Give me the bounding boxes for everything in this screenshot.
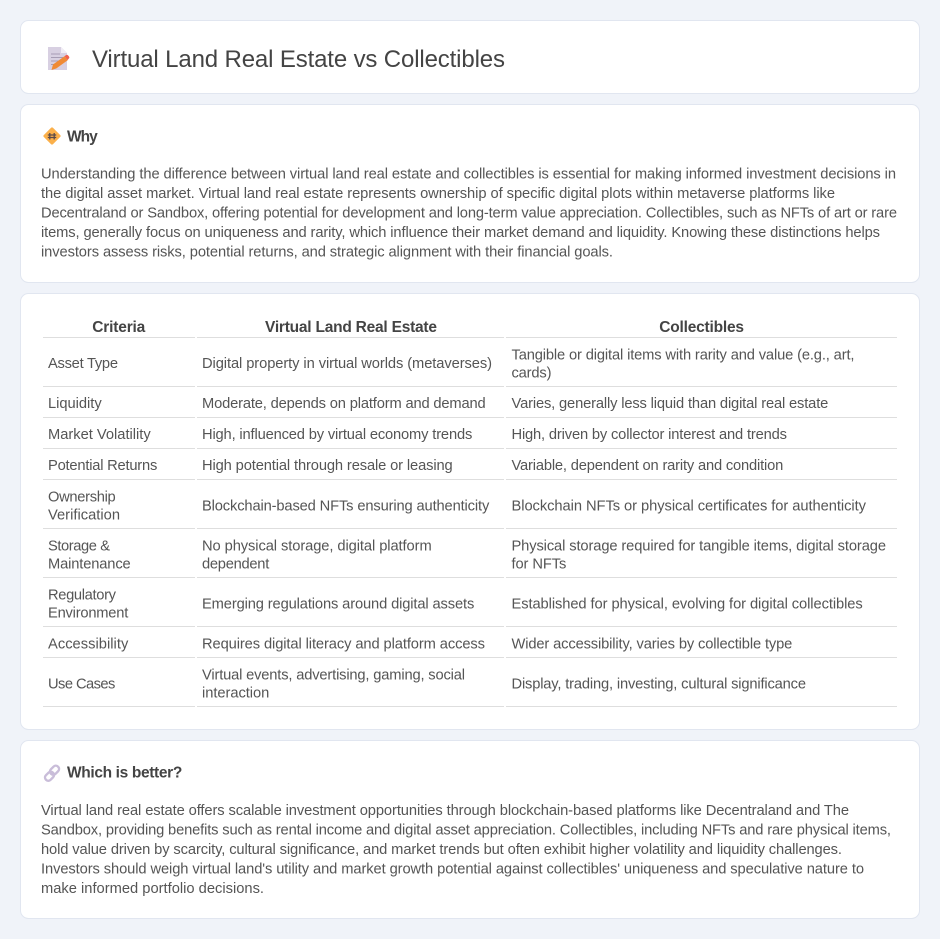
row: use cases: interaction (202, 686, 269, 702)
row: ownership verification: Ownership (48, 490, 116, 506)
row: regulatory environment: Regulatory (48, 588, 117, 604)
text block: which is better paragraph: Investors should weigh virtual land's utility and market growth potential against collectibles' uniqueness and speculative nature to (41, 862, 864, 878)
row: storage and maintenance: for NFTs (512, 556, 566, 572)
row: asset type (43, 347, 897, 386)
row: use cases: Use Cases (48, 676, 115, 692)
row: potential returns: Potential Returns (48, 458, 157, 474)
row: liquidity (43, 396, 897, 418)
row: storage and maintenance: No physical storage, digital platform (202, 538, 432, 554)
text block: which is better paragraph: hold value driven by scarcity, cultural significance, and market trends but often exhibit higher volatility and liquidity challenges. (41, 842, 842, 858)
text block: which is better paragraph (41, 803, 891, 897)
row: storage and maintenance: Maintenance (48, 556, 131, 572)
row: asset type: cards) (512, 365, 552, 381)
row: ownership verification: Verification (48, 508, 120, 524)
row: market volatility: High, driven by collector interest and trends (512, 427, 787, 443)
row: ownership verification: Blockchain NFTs or physical certificates for authenticity (512, 498, 867, 514)
row: regulatory environment: Emerging regulations around digital assets (202, 596, 474, 612)
row: asset type: Digital property in virtual worlds (metaverses) (202, 356, 492, 372)
text block: why paragraph: items, generally focus on uniqueness and rarity, which influence their market demand and liquidity. Knowing these distinctions helps (41, 225, 880, 241)
row: use cases: Virtual events, advertising, gaming, social (202, 668, 465, 684)
row: regulatory environment: Environment (48, 606, 128, 622)
table header row: Collectibles (659, 319, 744, 336)
row: use cases: Display, trading, investing, cultural significance (512, 676, 806, 692)
row: market volatility: High, influenced by virtual economy trends (202, 427, 472, 443)
row: accessibility: Accessibility (48, 636, 129, 652)
heading: why: Why (67, 128, 98, 146)
icon: chain link (44, 764, 60, 782)
text block: which is better paragraph: make informed portfolio decisions. (41, 881, 264, 897)
row: regulatory environment (43, 588, 897, 626)
row: use cases (43, 668, 897, 706)
text block: which is better paragraph: Sandbox, providing benefits such as rental income and digital asset appreciation. Collectibles, including NFTs and rare physical items, (41, 822, 891, 838)
row: ownership verification: Blockchain-based NFTs ensuring authenticity (202, 498, 490, 514)
row: liquidity: Moderate, depends on platform and demand (202, 396, 486, 412)
table header row: Virtual Land Real Estate (265, 319, 437, 336)
text block: why paragraph: Understanding the difference between virtual land real estate and collectibles is essential for making informed investment decisions in (41, 166, 896, 182)
icon: document with pencil (48, 47, 69, 70)
row: storage and maintenance: dependent (202, 556, 269, 572)
row: potential returns: Variable, dependent on rarity and condition (512, 458, 783, 474)
text block: why paragraph: Decentraland or Sandbox, offering potential for development and long-term value appreciation. Collectibles, such as NFTs of art or rare (41, 206, 897, 222)
row: accessibility (43, 636, 897, 658)
text block: which is better paragraph: Virtual land real estate offers scalable investment opportunities through blockchain-based platforms like Decentraland and The (41, 803, 849, 819)
text block: why paragraph: investors assess risks, potential returns, and strategic alignment with their financial goals. (41, 244, 613, 260)
row: accessibility: Requires digital literacy and platform access (202, 636, 485, 652)
heading: which is better: Which is better? (67, 765, 182, 782)
text block: why paragraph (41, 166, 897, 260)
row: storage and maintenance: Physical storage required for tangible items, digital storage (512, 538, 886, 554)
icon: orange diamond (43, 127, 61, 145)
title: Virtual Land Real Estate vs Collectibles (92, 46, 505, 73)
row: storage and maintenance: Storage & (48, 538, 110, 554)
panel: comparison table (20, 294, 920, 730)
row: market volatility (43, 427, 897, 448)
table header row (43, 319, 897, 338)
panel: header (20, 20, 920, 94)
row: potential returns: High potential through resale or leasing (202, 458, 453, 474)
row: asset type: Tangible or digital items with rarity and value (e.g., art, (512, 347, 854, 363)
row: regulatory environment: Established for physical, evolving for digital collectibles (512, 596, 863, 612)
row: potential returns (43, 458, 897, 480)
row: accessibility: Wider accessibility, varies by collectible type (512, 636, 792, 652)
panel: why (20, 104, 920, 282)
row: liquidity: Varies, generally less liquid than digital real estate (512, 396, 828, 412)
row: storage and maintenance (43, 538, 897, 578)
row: asset type: Asset Type (48, 356, 118, 372)
panel: which is better (20, 740, 920, 918)
row: ownership verification (43, 490, 897, 528)
row: liquidity: Liquidity (48, 396, 102, 412)
table header row: Criteria (92, 319, 146, 336)
row: market volatility: Market Volatility (48, 427, 151, 443)
text block: why paragraph: the digital asset market. Virtual land real estate represents ownership of specific digital plots within metaverse platforms like (41, 186, 835, 202)
